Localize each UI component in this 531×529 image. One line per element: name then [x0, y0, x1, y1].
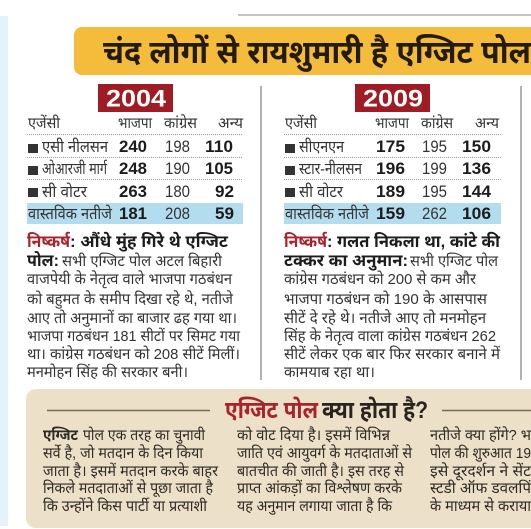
year badge: 2004	[98, 84, 173, 112]
table: 2004: भाजपा	[118, 115, 153, 132]
conclusion text: 2009: भाजपा गठबंधन को 190 के आसपास	[284, 290, 488, 308]
panel: 2009 exit polls	[284, 84, 501, 381]
conclusion text: 2004: : औंधे मुंह गिरे थे एग्जिट	[70, 231, 229, 252]
table: 2009: 195	[422, 137, 447, 156]
table: 2009: 195	[422, 182, 447, 201]
conclusion text: 2004: भाजपा गठबंधन 181 सीटों पर सिमट गया	[27, 327, 241, 345]
conclusion text: 2009: टक्कर का अनुमान:	[284, 251, 408, 271]
table: 2009: 175	[376, 137, 405, 156]
table: 2004: 198	[165, 137, 190, 156]
conclusion text: 2009: सभी एग्जिट पोल	[410, 253, 499, 270]
panel: 2004 exit polls	[27, 84, 243, 381]
table: 2009	[284, 114, 501, 224]
table: 2004: 180	[165, 182, 190, 201]
table: 2009: 199	[422, 159, 447, 178]
table: 2004: 110	[205, 137, 233, 156]
panel heading: एग्जिट पोल	[225, 396, 319, 424]
conclusion text: 2009: सिंह के नेतृत्व वाला कांग्रेस गठबंधन 262	[284, 327, 496, 346]
table: 2004: 208	[165, 204, 190, 223]
table: 2009: 150	[462, 137, 491, 156]
panel heading	[225, 396, 428, 424]
table: 2009: 144	[462, 182, 492, 201]
table: 2009: 159	[376, 204, 405, 223]
panel heading: क्या होता है?	[322, 396, 428, 424]
table: 2009: स्टार-नीलसन	[299, 160, 363, 178]
text column 2: को वोट दिया है। इसमें विभिन्न	[237, 426, 390, 444]
table: 2004: 105	[205, 159, 233, 178]
conclusion text: 2004: वाजपेयी के नेतृत्व वाले भाजपा गठबंधन	[27, 270, 233, 289]
conclusion text: 2004: सभी एग्जिट पोल अटल बिहारी	[62, 253, 223, 270]
table: 2004: 190	[165, 159, 190, 178]
conclusion text: 2009: कामयाब रहा था।	[284, 364, 375, 381]
text column 3: स्टडी ऑफ डवलपिं	[430, 479, 531, 497]
conclusion text: 2009	[284, 231, 501, 381]
text column 1: जाता है। इसमें मतदान करके बाहर	[43, 462, 219, 480]
conclusion text: 2004: मनमोहन सिंह की सरकार बनी।	[27, 363, 188, 381]
table: 2009: 106	[462, 204, 491, 223]
text column 3	[430, 426, 531, 515]
year badge: 2009	[355, 84, 430, 112]
table: 2004: 59	[215, 204, 234, 223]
text column 3: इसे दूरदर्शन ने सेंट	[430, 462, 531, 481]
table: 2009: 136	[462, 159, 491, 178]
table: 2004: कांग्रेस	[164, 114, 198, 132]
table: 2004: 240	[119, 137, 147, 156]
conclusion text: 2004: को बहुमत के समीप दिखा रहे थे, नतीजे	[27, 290, 234, 309]
table: 2004	[27, 114, 243, 224]
year badge: 2009: 2009	[363, 86, 423, 112]
table: 2009: अन्य	[475, 115, 499, 132]
year badge: 2004: 2004	[106, 86, 167, 112]
conclusion text: 2009: : गलत निकला था, कांटे की	[327, 231, 501, 251]
table: 2009: भाजपा	[375, 115, 410, 132]
table: 2004: एसी नीलसन	[42, 138, 109, 156]
table: 2009: 189	[376, 182, 405, 201]
text column 2: यह अनुमान लगाया जाता है कि	[237, 498, 392, 516]
table: 2004: 248	[119, 159, 147, 178]
text column 1: निकले मतदाताओं से पूछा जाता है	[43, 479, 214, 498]
text column 1: कि उन्होंने किस पार्टी या प्रत्याशी	[43, 497, 208, 515]
table: 2004: सी वोटर	[42, 183, 87, 201]
table: 2009: कांग्रेस	[421, 114, 454, 132]
text column 1: एग्जिट	[43, 427, 79, 444]
conclusion text: 2009: कांग्रेस गठबंधन को 200 से कम और	[284, 270, 477, 288]
text column 2: जाति एवं आयुवर्ग के मतदाताओं से	[237, 444, 413, 463]
conclusion text: 2004: आए तो अनुमानों का बाजार ढह गया था।	[27, 309, 237, 328]
table: 2004: अन्य	[218, 115, 243, 132]
table: 2009: सीएनएन	[299, 138, 345, 156]
text column 2	[237, 426, 413, 516]
text column 1	[43, 427, 219, 515]
conclusion text: 2009: सीटें दे रहे थे। नतीजे आए तो मनमोहन	[284, 309, 487, 327]
table: 2009: एजेंसी	[285, 114, 318, 132]
table: 2004: एजेंसी	[28, 114, 61, 132]
table: 2009: सी वोटर	[299, 183, 343, 201]
title banner	[74, 27, 531, 75]
text column 1: पोल एक तरह का चुनावी	[83, 427, 206, 445]
table: 2004: वास्तविक नतीजे	[28, 204, 113, 223]
conclusion text: 2009: निष्कर्ष	[284, 231, 328, 251]
table: 2004: 92	[215, 182, 234, 201]
table: 2004: 181	[119, 204, 147, 223]
text column 2: बातचीत की जाती है। इस तरह से	[237, 462, 405, 480]
table: 2004: ओआरजी मार्ग	[42, 159, 108, 178]
conclusion text: 2009: सीटें लेकर एक बार फिर सरकार बनाने में	[284, 345, 501, 363]
conclusion text: 2004	[27, 231, 241, 381]
table: 2009: 262	[422, 204, 447, 223]
panel: what is an exit poll	[26, 389, 531, 528]
conclusion text: 2004: था। कांग्रेस गठबंधन को 208 सीटें मिलीं।	[27, 345, 240, 363]
text column 1: सर्वे है, जो मतदान के दिन किया	[43, 444, 204, 462]
conclusion text: 2004: पोल:	[27, 250, 59, 270]
conclusion text: 2004: निष्कर्ष	[27, 231, 71, 251]
table: 2009: 196	[376, 159, 405, 178]
text column 2: प्राप्त आंकड़ों का विश्लेषण करके	[237, 479, 402, 497]
table: 2004: 263	[119, 182, 147, 201]
table: 2009: वास्तविक नतीजे	[285, 204, 370, 223]
